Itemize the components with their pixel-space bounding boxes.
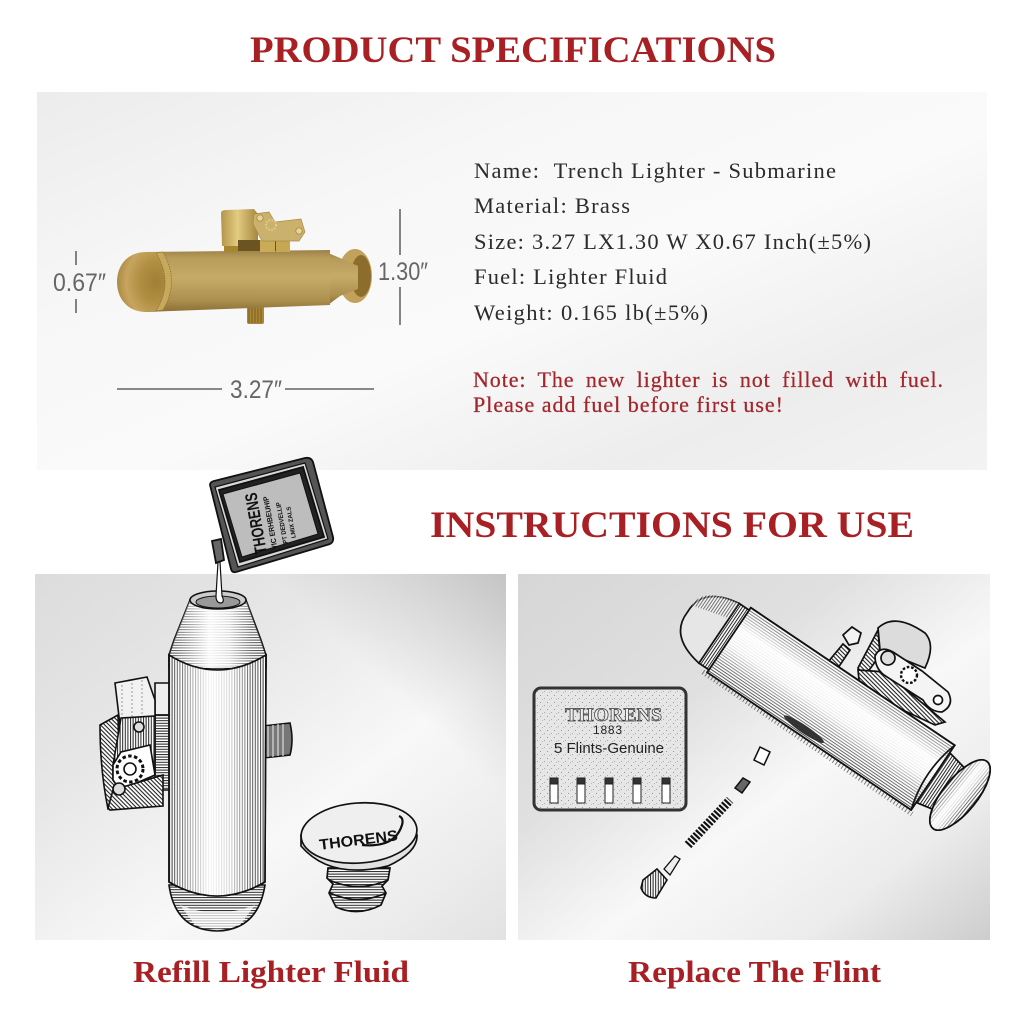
card logo: THORENS (565, 705, 662, 726)
barrel group (666, 580, 979, 826)
flint slots (550, 778, 670, 803)
dimension: height 1.30: 1.30″ (378, 258, 428, 286)
note: Note: The new lighter is not filled with fuel. (473, 367, 943, 392)
card year: 1883 (593, 723, 622, 737)
tin text: PT DEDVELLIP (275, 501, 290, 544)
caption: refill lighter fluid: Refill Lighter Fluid (133, 954, 409, 989)
illustration: lighter tilted (666, 580, 1000, 839)
dimension: height 0.67 (53, 251, 106, 313)
panel: specifications (37, 92, 987, 470)
cap top (299, 799, 419, 867)
knurled ring (156, 252, 172, 311)
knurled collar (699, 603, 749, 670)
screw pin (664, 856, 680, 875)
mechanism front block (115, 677, 155, 725)
tin outer (210, 458, 333, 572)
tube (754, 747, 770, 765)
main body (145, 250, 330, 312)
tin text: THORENS (241, 491, 271, 556)
tin text: LMIX ZALS (286, 506, 298, 538)
fill opening (190, 591, 246, 609)
bottom dome (169, 885, 265, 931)
spec list: Weight: 0.165 lb(±5%) (474, 300, 708, 325)
top post (828, 644, 850, 668)
long spring (688, 800, 730, 845)
heading: instructions for use: INSTRUCTIONS FOR USE (430, 505, 914, 546)
tin label (223, 473, 318, 557)
spec list: Material: Brass (474, 193, 630, 218)
bottom knob (247, 304, 264, 324)
body (707, 608, 955, 810)
rear neck (328, 253, 358, 305)
end flange (920, 751, 1000, 839)
spec list: Name: Trench Lighter - Submarine (474, 158, 836, 183)
cap rim (301, 835, 417, 870)
main barrel (169, 655, 266, 896)
mechanism block (221, 209, 258, 246)
dome cap (667, 582, 739, 663)
tin text: VIC ERHBEUHIP (261, 496, 279, 550)
mechanism back plate (100, 715, 120, 809)
ground shadow hatch (703, 672, 912, 814)
dimension: height 0.67: 0.67″ (53, 269, 106, 297)
dimension: height 1.30 (378, 209, 428, 325)
spec list: Fuel: Lighter Fluid (474, 264, 667, 289)
striker arm (253, 212, 305, 241)
rivets (134, 722, 144, 732)
panel: refill lighter fluid (35, 458, 506, 940)
dimension: length 3.27: 3.27″ (230, 376, 282, 404)
note (473, 367, 943, 417)
heading: product specifications: PRODUCT SPECIFICATIONS (250, 30, 776, 71)
rear neck (916, 753, 974, 819)
sun engraving (266, 220, 276, 230)
striker arm (113, 716, 155, 790)
striker arm (875, 649, 950, 712)
cap logo: THORENS (318, 827, 399, 854)
rear wheel cylinder (878, 621, 930, 668)
small spring (735, 778, 750, 793)
fuel stream (216, 562, 223, 603)
note: Please add fuel before first use! (473, 392, 783, 417)
knurled side knob (263, 723, 292, 758)
slot (782, 712, 826, 746)
threads (327, 868, 390, 912)
illustration: fuel tin (210, 458, 333, 572)
body end ring (906, 742, 955, 810)
caption: replace the flint: Replace The Flint (628, 954, 882, 989)
flint card (534, 688, 686, 810)
illustration: lighter upright (100, 562, 292, 931)
base plate (108, 775, 163, 810)
tin text (241, 486, 299, 556)
illustration: filler cap (299, 799, 419, 912)
gear wheel (117, 756, 143, 782)
card caption: 5 Flints-Genuine (554, 740, 664, 757)
mechanism rear block (155, 683, 175, 715)
tin rim (215, 463, 328, 567)
photo: brass submarine lighter (117, 209, 372, 324)
panel: replace the flint (518, 574, 1000, 940)
dome cap (117, 252, 166, 312)
spec list (474, 158, 871, 325)
rear flange (338, 249, 372, 303)
spout (212, 539, 224, 563)
flint parts (641, 747, 770, 898)
bullet top cone (169, 600, 266, 668)
spec list: Size: 3.27 LX1.30 W X0.67 Inch(±5%) (474, 229, 871, 254)
screw knob (641, 869, 667, 898)
